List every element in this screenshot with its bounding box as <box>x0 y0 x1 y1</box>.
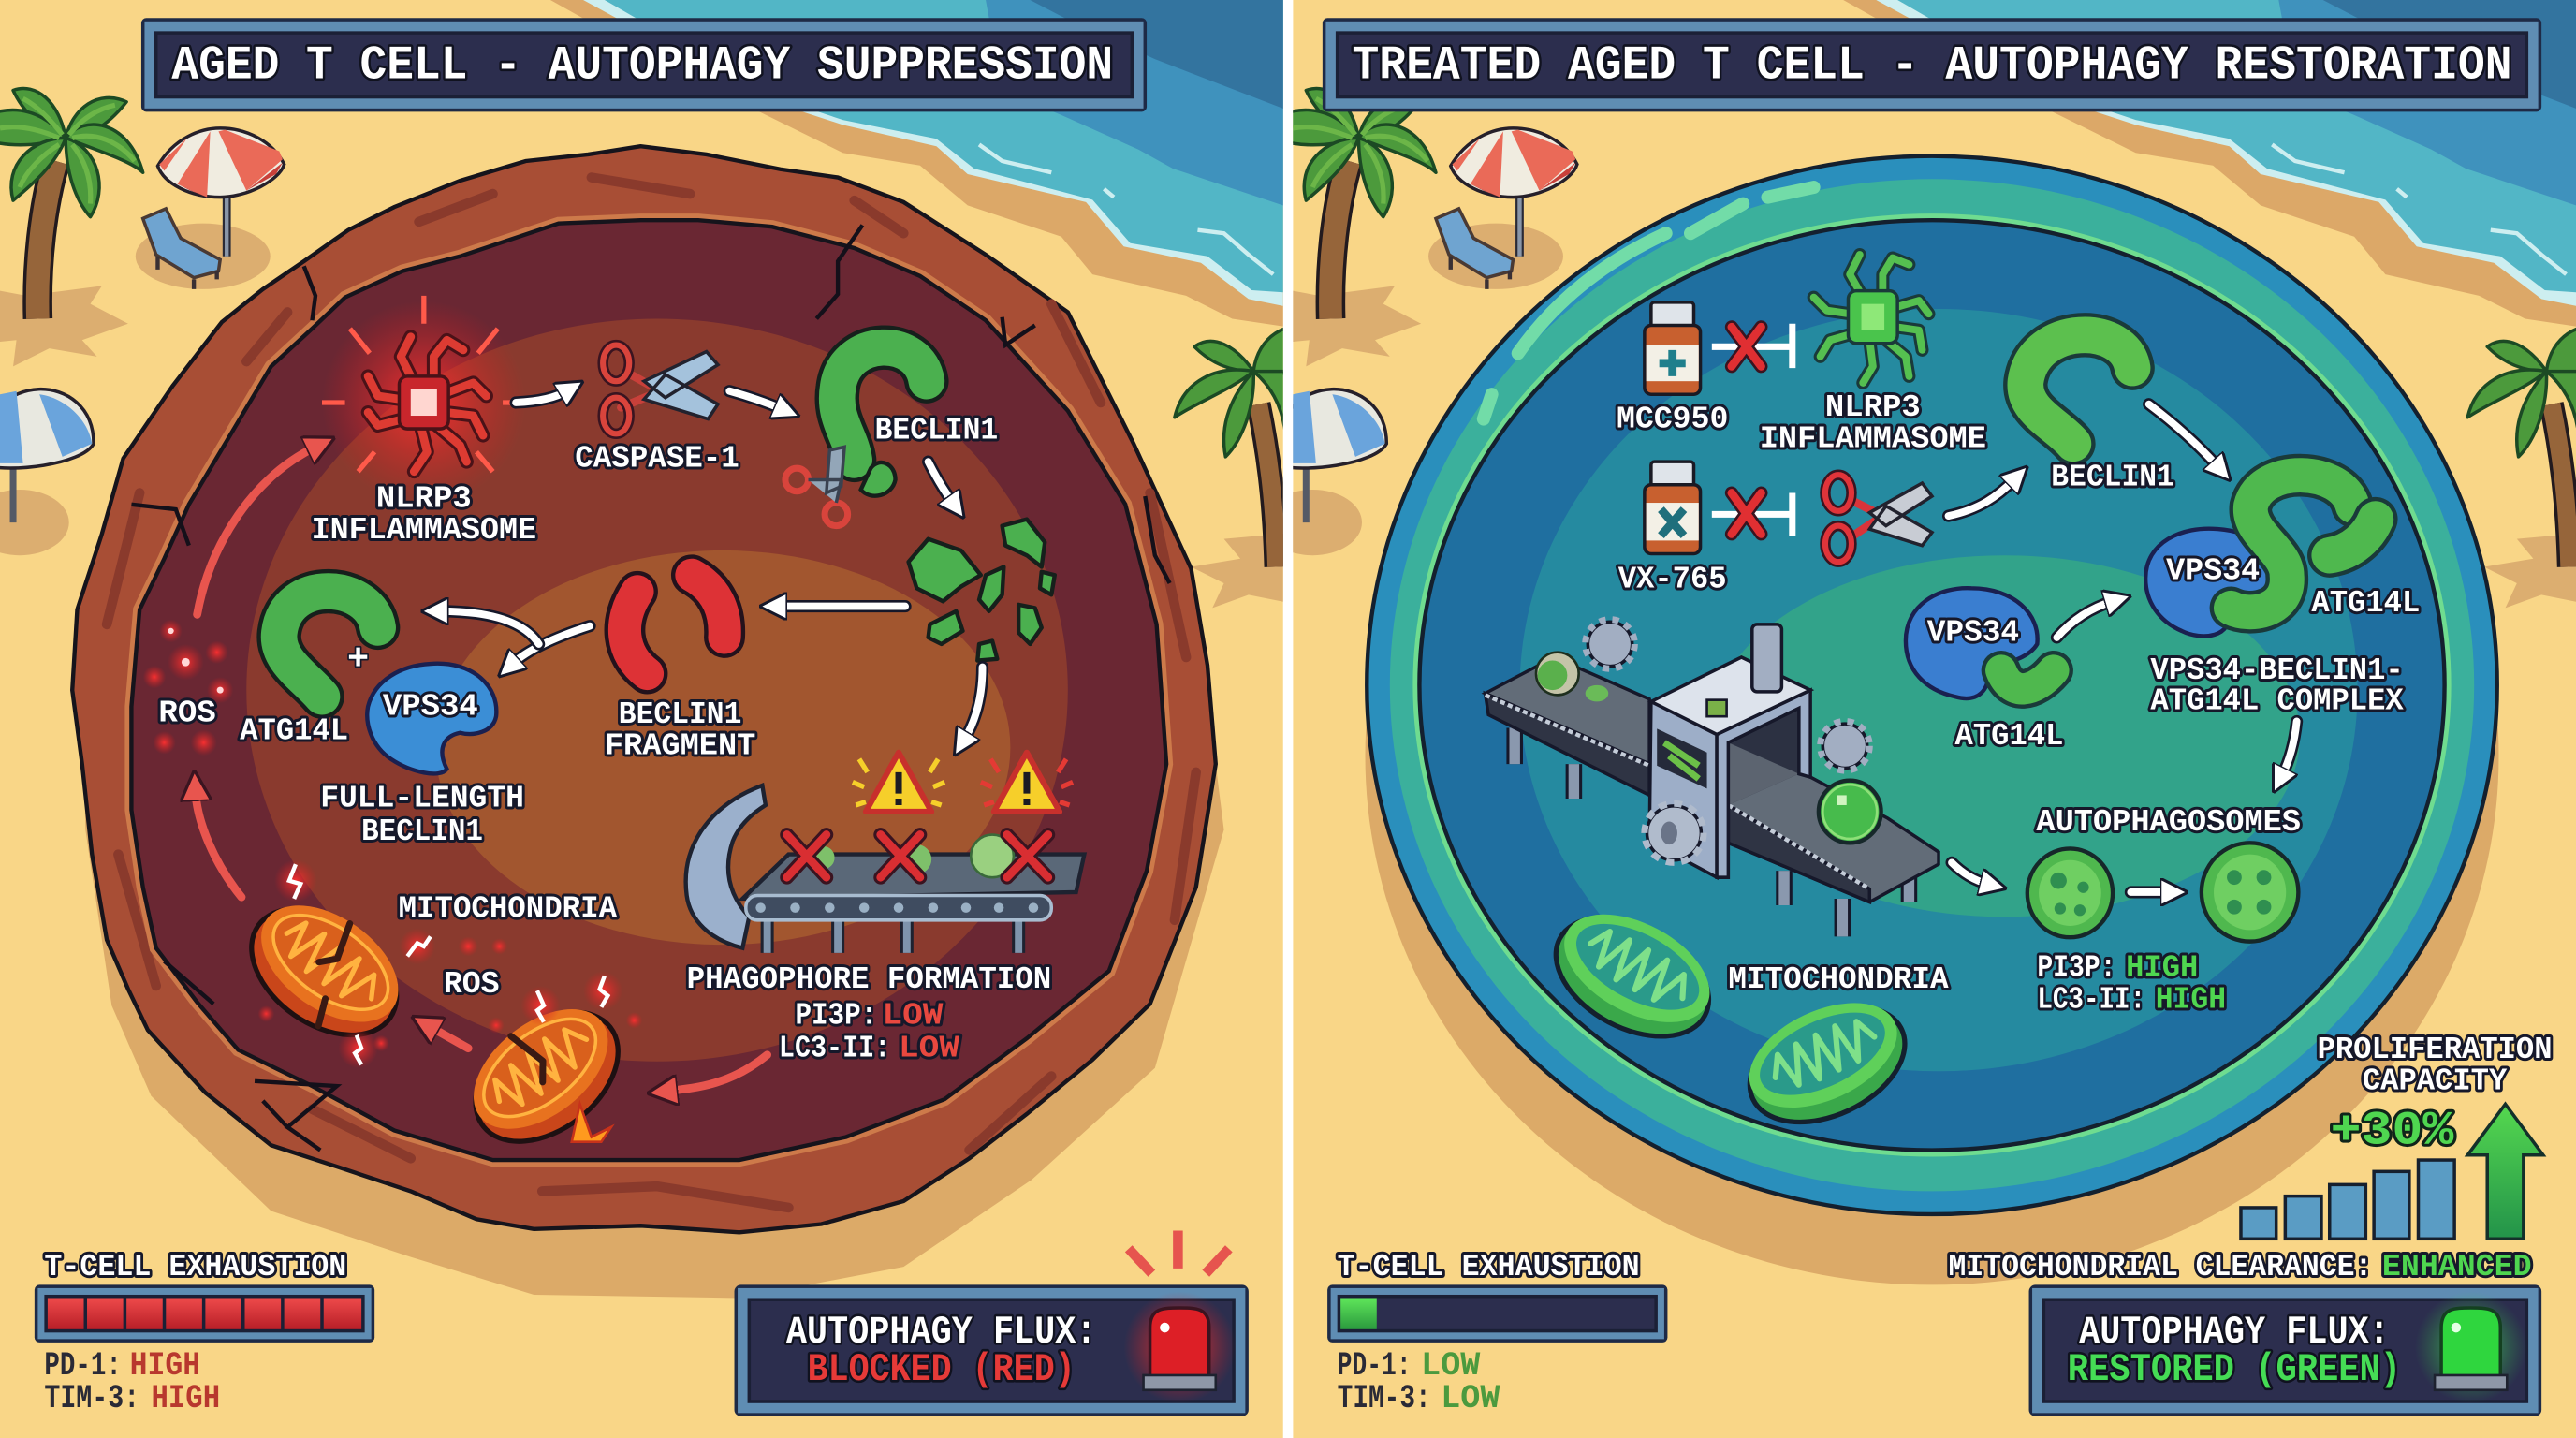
label: Beclin1 treated: BECLIN1 <box>2051 461 2174 496</box>
icon: phagophore gripper <box>686 785 766 948</box>
stat: PD-1 high: PD-1: <box>44 1347 122 1385</box>
label: full-length Beclin1: BECLIN1 <box>361 814 483 850</box>
T-cell exhaustion heading right: T-CELL EXHAUSTION <box>1338 1250 1640 1285</box>
stat: TIM-3 high <box>44 1380 220 1417</box>
label: PI3P low <box>795 998 943 1034</box>
title banner right: TREATED AGED T CELL - AUTOPHAGY RESTORATION <box>1352 39 2512 93</box>
label: phagophore formation: PHAGOPHORE FORMATION <box>687 962 1051 998</box>
panel: autophagy flux blocked <box>735 1284 1249 1416</box>
label: LC3-II high: HIGH <box>2156 983 2226 1019</box>
label: NLRP3 inflammasome <box>311 483 538 541</box>
arrow: low phagophore to mitochondria <box>668 1055 768 1091</box>
membrane cracks <box>131 225 1170 1151</box>
arrow: fragments to blocked phagophore <box>964 668 983 740</box>
arrow: machine to autophagosome <box>1952 862 1988 884</box>
label: caspase-1: CASPASE-1 <box>575 441 739 477</box>
label: autophagosomes: AUTOPHAGOSOMES <box>2036 805 2301 841</box>
panel: treated aged T cell, autophagy restoration <box>1264 0 2576 1438</box>
membrane inner lip <box>131 220 1166 1160</box>
label: VPS34 in complex: VPS34 <box>2166 554 2260 590</box>
label: Beclin1 fragment: FRAGMENT <box>605 729 755 765</box>
arrow: Beclin1 to fragments <box>929 462 953 503</box>
arrow: fragment blocks full-length complex <box>513 626 590 664</box>
cell interior <box>1419 220 2445 1151</box>
arrow: caspase-1 inhibited to Beclin1 <box>1949 479 2014 516</box>
T-cell exhaustion heading left: T-CELL EXHAUSTION <box>44 1250 346 1285</box>
cell shadow right <box>1365 227 2499 1284</box>
label: Beclin1 fragment: BECLIN1 <box>619 697 741 733</box>
icon: red Beclin1 fragment <box>624 575 724 674</box>
label: PI3P high <box>2037 950 2198 986</box>
label: MCC950: MCC950 <box>1617 402 1728 437</box>
membrane sheen <box>1484 187 1814 419</box>
cytoplasm inner zone <box>435 550 1010 945</box>
stat: PD-1 low <box>1338 1347 1481 1385</box>
panel: autophagy flux restored: RESTORED (GREEN) <box>2068 1347 2401 1392</box>
stat: TIM-3 high: HIGH <box>151 1380 220 1417</box>
label: full-length Beclin1 <box>320 782 524 850</box>
arrow: VPS34 to complex <box>2056 601 2113 638</box>
label: ATG14L in complex: ATG14L <box>2311 586 2420 622</box>
arrow: ROS to NLRP3 <box>198 447 315 614</box>
cell: damaged membrane <box>72 146 1216 1232</box>
cytoplasm inner zone <box>1708 555 2300 917</box>
label: PI3P low: PI3P: <box>795 998 877 1034</box>
icon: full-length Beclin1 <box>279 592 378 697</box>
gauge: exhaustion low <box>1327 1284 1667 1343</box>
icon: red warning triangle <box>981 753 1073 812</box>
icon: VX-765 bottle <box>1645 462 1701 553</box>
title banner right <box>1323 18 2541 111</box>
icon: Beclin1 green fragments <box>909 520 1055 661</box>
cell interior dark <box>131 220 1166 1160</box>
label: complex name: ATG14L COMPLEX <box>2150 683 2404 719</box>
panel: autophagy flux restored: AUTOPHAGY FLUX: <box>2079 1310 2390 1355</box>
arrow: ROS between mitochondria <box>431 1027 468 1049</box>
icon: caspase-1 scissors <box>603 345 718 433</box>
icon: flame on mitochondrion <box>572 1104 611 1142</box>
cell: healthy membrane outer <box>1367 156 2497 1214</box>
plus sign: + <box>347 638 369 680</box>
panel: aged T cell, autophagy suppression <box>0 0 1298 1438</box>
title banner left <box>141 18 1147 111</box>
icon: inhibited caspase-1 scissors <box>1825 475 1932 562</box>
label: mitochondrial clearance enhanced: MITOCHONDRIAL CLEARANCE: <box>1949 1250 2372 1285</box>
stat: PD-1 low: PD-1: <box>1338 1347 1412 1385</box>
label: proliferation capacity <box>2318 1033 2553 1100</box>
icon: yellow warning triangle <box>853 753 944 812</box>
label: Beclin1: BECLIN1 <box>875 414 998 449</box>
gauge: exhaustion full <box>35 1284 374 1343</box>
icon: NLRP3 inflammasome (inhibited) <box>1814 255 1928 383</box>
label: PI3P high: PI3P: <box>2037 950 2116 986</box>
inhibition mark: MCC950 on NLRP3 <box>1712 324 1793 368</box>
label: LC3-II high: LC3-II: <box>2037 983 2145 1019</box>
label: proliferation capacity: PROLIFERATION <box>2318 1033 2553 1068</box>
icon: mature autophagosome <box>2202 843 2298 942</box>
icon: Beclin1 protein being cut <box>785 347 927 526</box>
membrane band <box>1390 179 2474 1191</box>
icon: damaged mitochondrion 1 <box>228 880 422 1061</box>
label: complex name <box>2150 653 2404 719</box>
panel: autophagy flux blocked: AUTOPHAGY FLUX: <box>786 1310 1097 1355</box>
label: mitochondria: MITOCHONDRIA <box>399 891 617 927</box>
icon: ROS sparks around mitochondria <box>258 859 642 1068</box>
beach scene right <box>1264 0 2576 1438</box>
icon: ROS particles <box>143 620 233 756</box>
label: NLRP3 inflammasome treated: INFLAMMASOME <box>1760 421 1986 457</box>
arrow: proliferation up <box>2467 1104 2543 1239</box>
membrane streaks <box>107 178 1196 1208</box>
stat: PD-1 low: LOW <box>1421 1347 1481 1385</box>
arrow: fragment displaces Beclin1 <box>440 611 539 644</box>
label: mitochondria treated: MITOCHONDRIA <box>1728 962 1949 998</box>
label: NLRP3 inflammasome treated: NLRP3 <box>1825 390 1921 426</box>
label: VX-765: VX-765 <box>1618 562 1727 597</box>
label: VPS34 free: VPS34 <box>1927 615 2019 651</box>
stat: PD-1 high <box>44 1347 200 1385</box>
icon: free VPS34 with ATG14L <box>1906 588 2054 698</box>
label: mitochondrial clearance enhanced: ENHANCED <box>2382 1250 2532 1285</box>
stat: TIM-3 low: TIM-3: <box>1338 1380 1431 1417</box>
arrow: between autophagosomes <box>2130 888 2169 896</box>
arrow: Beclin1 to complex <box>2149 404 2217 466</box>
label: ROS: ROS <box>158 696 216 731</box>
icon: autophagosome forming <box>2027 848 2113 937</box>
label: NLRP3 inflammasome: NLRP3 <box>376 481 472 517</box>
label: Beclin1 fragment <box>605 697 755 765</box>
icon: alarm rays <box>1129 1231 1229 1273</box>
label: VPS34: VPS34 <box>383 689 478 725</box>
label: complex name: VPS34-BECLIN1- <box>2150 653 2404 689</box>
icon: NLRP3 inflammasome (active) <box>322 296 514 492</box>
cell shadow left <box>84 771 1224 1298</box>
icon: VPS34 <box>367 664 496 773</box>
cytoplasm mid zone <box>246 318 1068 1062</box>
stat: TIM-3 high: TIM-3: <box>44 1380 139 1417</box>
arrow: fragments to Beclin1 fragment <box>779 603 905 609</box>
label: ROS near mitochondria: ROS <box>444 967 500 1003</box>
panel: autophagy flux blocked: BLOCKED (RED) <box>808 1347 1076 1392</box>
arrow: caspase-1 to Beclin1 <box>729 391 782 409</box>
beach scene left <box>0 0 1298 1438</box>
icon: intact Beclin1 <box>2026 335 2132 444</box>
label: full-length Beclin1: FULL-LENGTH <box>320 782 524 817</box>
arrow: mitochondria to ROS <box>196 792 242 897</box>
icon: healthy mitochondrion 2 <box>1730 980 1924 1145</box>
stat: TIM-3 low: LOW <box>1441 1380 1500 1417</box>
label: LC3-II low: LC3-II: <box>779 1031 890 1066</box>
label: PI3P high: HIGH <box>2126 950 2198 986</box>
title banner left: AGED T CELL - AUTOPHAGY SUPPRESSION <box>171 39 1113 93</box>
icon: stalled conveyor <box>742 835 1084 953</box>
icon: healthy mitochondrion 1 <box>1536 890 1731 1061</box>
icon: MCC950 bottle <box>1645 302 1701 394</box>
arrow: complex to autophagosomes <box>2282 721 2297 775</box>
bar chart: proliferation <box>2241 1160 2454 1239</box>
label: LC3-II high <box>2037 983 2226 1019</box>
panel: autophagy flux restored <box>2029 1284 2541 1416</box>
icon: VPS34-Beclin1-ATG14L complex <box>2145 476 2376 636</box>
icon: damaged mitochondrion 2 <box>449 983 643 1167</box>
label: LC3-II low: LOW <box>899 1031 959 1066</box>
cytoplasm mid zone <box>1519 309 2358 1071</box>
arrow: NLRP3 to caspase-1 <box>516 391 567 403</box>
label: PI3P low: LOW <box>882 998 943 1034</box>
icon: running conveyor machine <box>1486 620 1939 936</box>
light green ring <box>1412 213 2452 1157</box>
stat: PD-1 high: HIGH <box>130 1347 200 1385</box>
label: proliferation capacity: CAPACITY <box>2363 1064 2507 1100</box>
label: NLRP3 inflammasome treated <box>1760 390 1986 457</box>
value: +30%: +30% <box>2331 1105 2454 1158</box>
inhibition mark: VX-765 on caspase-1 <box>1712 493 1793 536</box>
label: ATG14L free: ATG14L <box>1955 719 2063 755</box>
label: ATG14L: ATG14L <box>240 714 348 750</box>
label: NLRP3 inflammasome: INFLAMMASOME <box>312 513 536 549</box>
